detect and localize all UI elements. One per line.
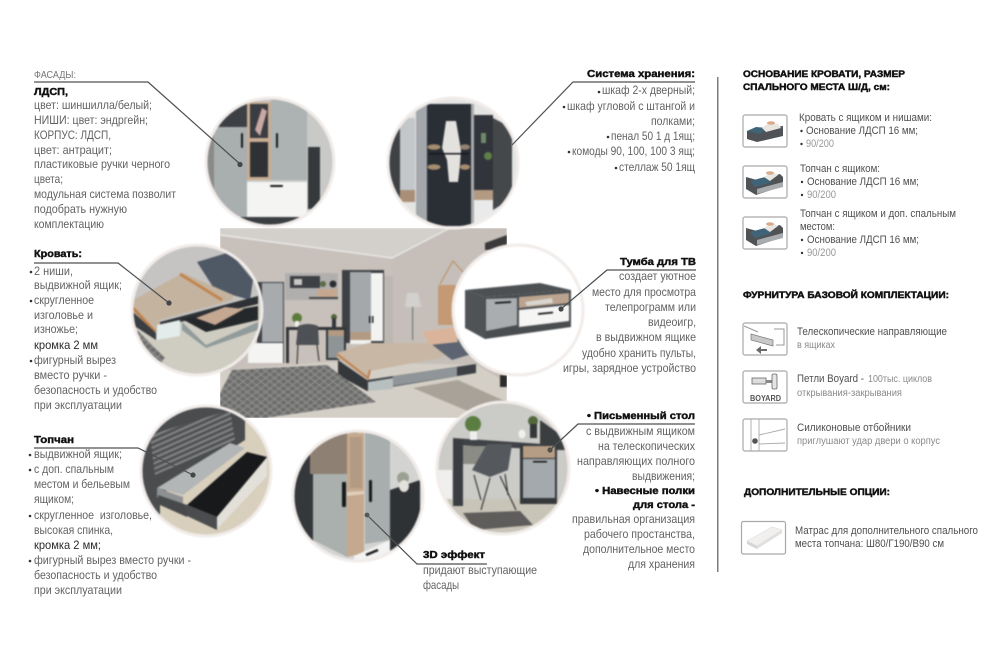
bed text: выдвижной ящик;: [34, 278, 122, 292]
dot marker: [547, 447, 553, 453]
photo circle: TV stand: [453, 245, 583, 375]
panel: extra options: [742, 487, 978, 554]
TV stand text: создает уютное: [619, 269, 696, 283]
facades text: цвет: шиншилла/белый;: [34, 98, 152, 112]
facades text: цвет: антрацит;: [34, 143, 112, 157]
daybed extra item text: [800, 208, 956, 259]
mattress text: [795, 525, 978, 550]
wardrobe: [342, 270, 384, 343]
telescopic slides text: [797, 326, 947, 351]
icon: daybed with drawer: [743, 166, 787, 198]
desk text: • Навесные полки: [595, 485, 695, 497]
desk text: • Письменный стол: [587, 410, 695, 422]
photo circle: facades: [205, 98, 335, 228]
icon: mattress: [742, 522, 786, 554]
daybed extra item text: Топчан с ящиком и доп. спальным: [800, 208, 956, 220]
panel: bed base sizes: [743, 69, 956, 259]
daybed extra item text: Основание ЛДСП 16 мм;: [807, 234, 919, 246]
dot marker: [237, 162, 243, 167]
facades text: цвета;: [34, 172, 63, 186]
desk text: дополнительное место: [583, 542, 695, 556]
facades text: ЛДСП,: [34, 86, 68, 98]
daybed text: [29, 434, 191, 597]
daybed text: при эксплуатации: [34, 583, 122, 597]
icon: silicone bumpers: [743, 419, 787, 451]
telescopic slides text: Телескопические направляющие: [797, 326, 947, 338]
bed item text: 90/200: [806, 138, 834, 150]
panel: daybed: [29, 406, 271, 597]
bed text: кромка 2 мм: [34, 338, 98, 352]
TV stand text: видеоигр,: [648, 315, 696, 329]
desk text: для хранения: [628, 557, 695, 571]
mattress text: места топчана: Ш80/Г190/В90 см: [795, 538, 944, 550]
leader line: [34, 82, 240, 164]
bed text: Кровать:: [34, 248, 82, 260]
bed text: 2 ниши,: [34, 264, 73, 278]
leader line: [550, 424, 695, 450]
panel: 3D effect: [293, 431, 537, 592]
bed text: при эксплуатации: [34, 398, 122, 412]
icon: bed with drawer: [743, 115, 787, 147]
daybed text: кромка 2 мм;: [34, 538, 101, 552]
3D effect text: [423, 549, 537, 592]
storage text: [563, 68, 695, 174]
storage text: шкаф 2-х дверный;: [602, 83, 695, 97]
chair: [296, 324, 319, 345]
facades text: [34, 69, 176, 231]
daybed text: выдвижной ящик;: [34, 447, 122, 461]
rug left: [220, 365, 376, 418]
silicone bumpers text: [797, 422, 940, 447]
TV stand text: в выдвижном ящике: [596, 330, 696, 344]
silicone bumpers text: Силиконовые отбойники: [797, 422, 911, 434]
3D effect text: фасады: [423, 578, 459, 592]
bed text: [30, 248, 157, 412]
icon: telescopic slides: [743, 323, 787, 355]
icon: daybed with extra sleeping place: [743, 217, 787, 249]
daybed text: ящиком;: [34, 492, 74, 506]
Boyard hinge text: [797, 373, 932, 399]
bed text: фигурный вырез: [34, 353, 116, 367]
lamp: [405, 293, 421, 307]
bed item text: Кровать с ящиком и нишами:: [799, 112, 932, 124]
dot marker: [166, 300, 172, 306]
heading: bed base: [743, 69, 906, 93]
panel: bed: [30, 245, 262, 412]
icon: Boyard hinge: [743, 371, 787, 403]
leader line: [34, 448, 193, 475]
daybed item text: [800, 163, 919, 201]
daybed text: Топчан: [34, 434, 74, 446]
rug right: [413, 380, 507, 412]
desk text: на телескопических: [598, 439, 695, 453]
panel: storage system: [388, 68, 695, 228]
TV stand text: место для просмотра: [592, 285, 696, 299]
TV stand text: игры, зарядное устройство: [563, 361, 696, 375]
storage text: шкаф угловой с штангой и: [567, 99, 695, 113]
3D effect text: придают выступающие: [423, 563, 537, 577]
bed text: скругленное: [34, 293, 94, 307]
desk text: правильная организация: [572, 512, 695, 526]
facades text: КОРПУС: ЛДСП,: [34, 128, 111, 142]
desk text: для стола -: [633, 499, 696, 511]
daybed text: скругленное изголовье,: [34, 508, 152, 522]
desk text: [572, 410, 696, 571]
TV stand text: [563, 256, 696, 375]
storage text: Система хранения:: [587, 68, 695, 80]
bed text: вместо ручки -: [34, 368, 107, 382]
daybed extra item text: местом:: [800, 221, 835, 233]
wall hanging: [440, 261, 463, 284]
facades text: ФАСАДЫ:: [34, 69, 76, 81]
3D effect text: 3D эффект: [423, 549, 485, 561]
photo circle: daybed: [141, 406, 271, 536]
daybed text: безопасность и удобство: [34, 568, 157, 582]
desk text: рабочего простанства,: [584, 527, 695, 541]
bed text: изголовье и: [34, 308, 93, 322]
bed text: изножье;: [34, 322, 78, 336]
photo circle: desk: [437, 402, 569, 534]
daybed item text: Топчан с ящиком:: [800, 163, 880, 175]
dot marker: [558, 306, 564, 312]
bed text: безопасность и удобство: [34, 383, 157, 397]
facades text: пластиковые ручки черного: [34, 157, 170, 171]
daybed text: местом и бельевым: [34, 477, 130, 491]
leader line: [561, 270, 696, 309]
storage text: комоды 90, 100, 100 3 ящ;: [572, 144, 695, 158]
leader line: [512, 82, 695, 145]
panel: writing desk: [437, 402, 696, 571]
heading: extra options: ДОПОЛНИТЕЛЬНЫЕ ОПЦИИ:: [744, 487, 890, 498]
storage text: полками;: [651, 114, 695, 128]
telescopic slides text: в ящиках: [797, 340, 835, 351]
daybed text: фигурный вырез вместо ручки -: [34, 553, 191, 567]
desk text: выдвижения;: [632, 469, 695, 483]
daybed item text: Основание ЛДСП 16 мм;: [807, 176, 919, 188]
bed item text: [799, 112, 932, 150]
bed: [338, 360, 367, 391]
bed item text: Основание ЛДСП 16 мм;: [806, 125, 918, 137]
dot marker: [190, 472, 196, 478]
Boyard hinge text: 100тыс. циклов: [868, 374, 932, 385]
leader line: [34, 263, 169, 303]
facades text: НИШИ: цвет: эндргейн;: [34, 113, 148, 127]
leader line: [367, 515, 487, 564]
facades text: комплектацию: [34, 217, 104, 231]
daybed text: с доп. спальным: [34, 462, 114, 476]
heading: hardware: ФУРНИТУРА БАЗОВОЙ КОМПЛЕКТАЦИИ:: [743, 289, 949, 301]
desk: [286, 327, 346, 330]
TV stand text: удобно хранить пульты,: [582, 346, 696, 360]
facades text: модульная система позволит: [34, 187, 176, 201]
heading: bed base: ОСНОВАНИЕ КРОВАТИ, РАЗМЕР: [743, 69, 906, 80]
tall cabinet: [257, 282, 284, 363]
photo circle: 3D facades: [293, 431, 423, 561]
storage text: стеллаж 50 1ящ: [619, 160, 695, 174]
desk text: с выдвижным ящиком: [586, 424, 695, 438]
silicone bumpers text: приглушают удар двери о корпус: [797, 436, 940, 447]
icon: Boyard hinge: BOYARD: [750, 394, 781, 403]
daybed extra item text: 90/200: [807, 247, 836, 259]
photo circle: bed: [132, 245, 262, 375]
Boyard hinge text: Петли Boyard -: [797, 373, 864, 385]
heading: bed base: СПАЛЬНОГО МЕСТА Ш/Д, см:: [743, 82, 890, 93]
mattress text: Матрас для дополнительного спального: [795, 525, 978, 537]
panel: facades: [34, 69, 335, 231]
panel: TV stand: [453, 245, 696, 375]
facades text: подобрать нужную: [34, 202, 127, 216]
storage text: пенал 50 1 д 1ящ;: [611, 129, 695, 143]
TV stand text: Тумба для ТВ: [620, 256, 696, 268]
daybed text: высокая спинка,: [34, 523, 113, 537]
photo: bedroom interior: [220, 228, 507, 418]
TV stand text: телепрограмм или: [605, 300, 696, 314]
desk text: направляющих полного: [577, 454, 695, 468]
dot marker: [365, 513, 369, 517]
panel: hardware: [743, 289, 949, 451]
daybed item text: 90/200: [807, 189, 836, 201]
Boyard hinge text: открывания-закрывания: [797, 388, 902, 399]
photo circle: wardrobe: [388, 98, 518, 228]
